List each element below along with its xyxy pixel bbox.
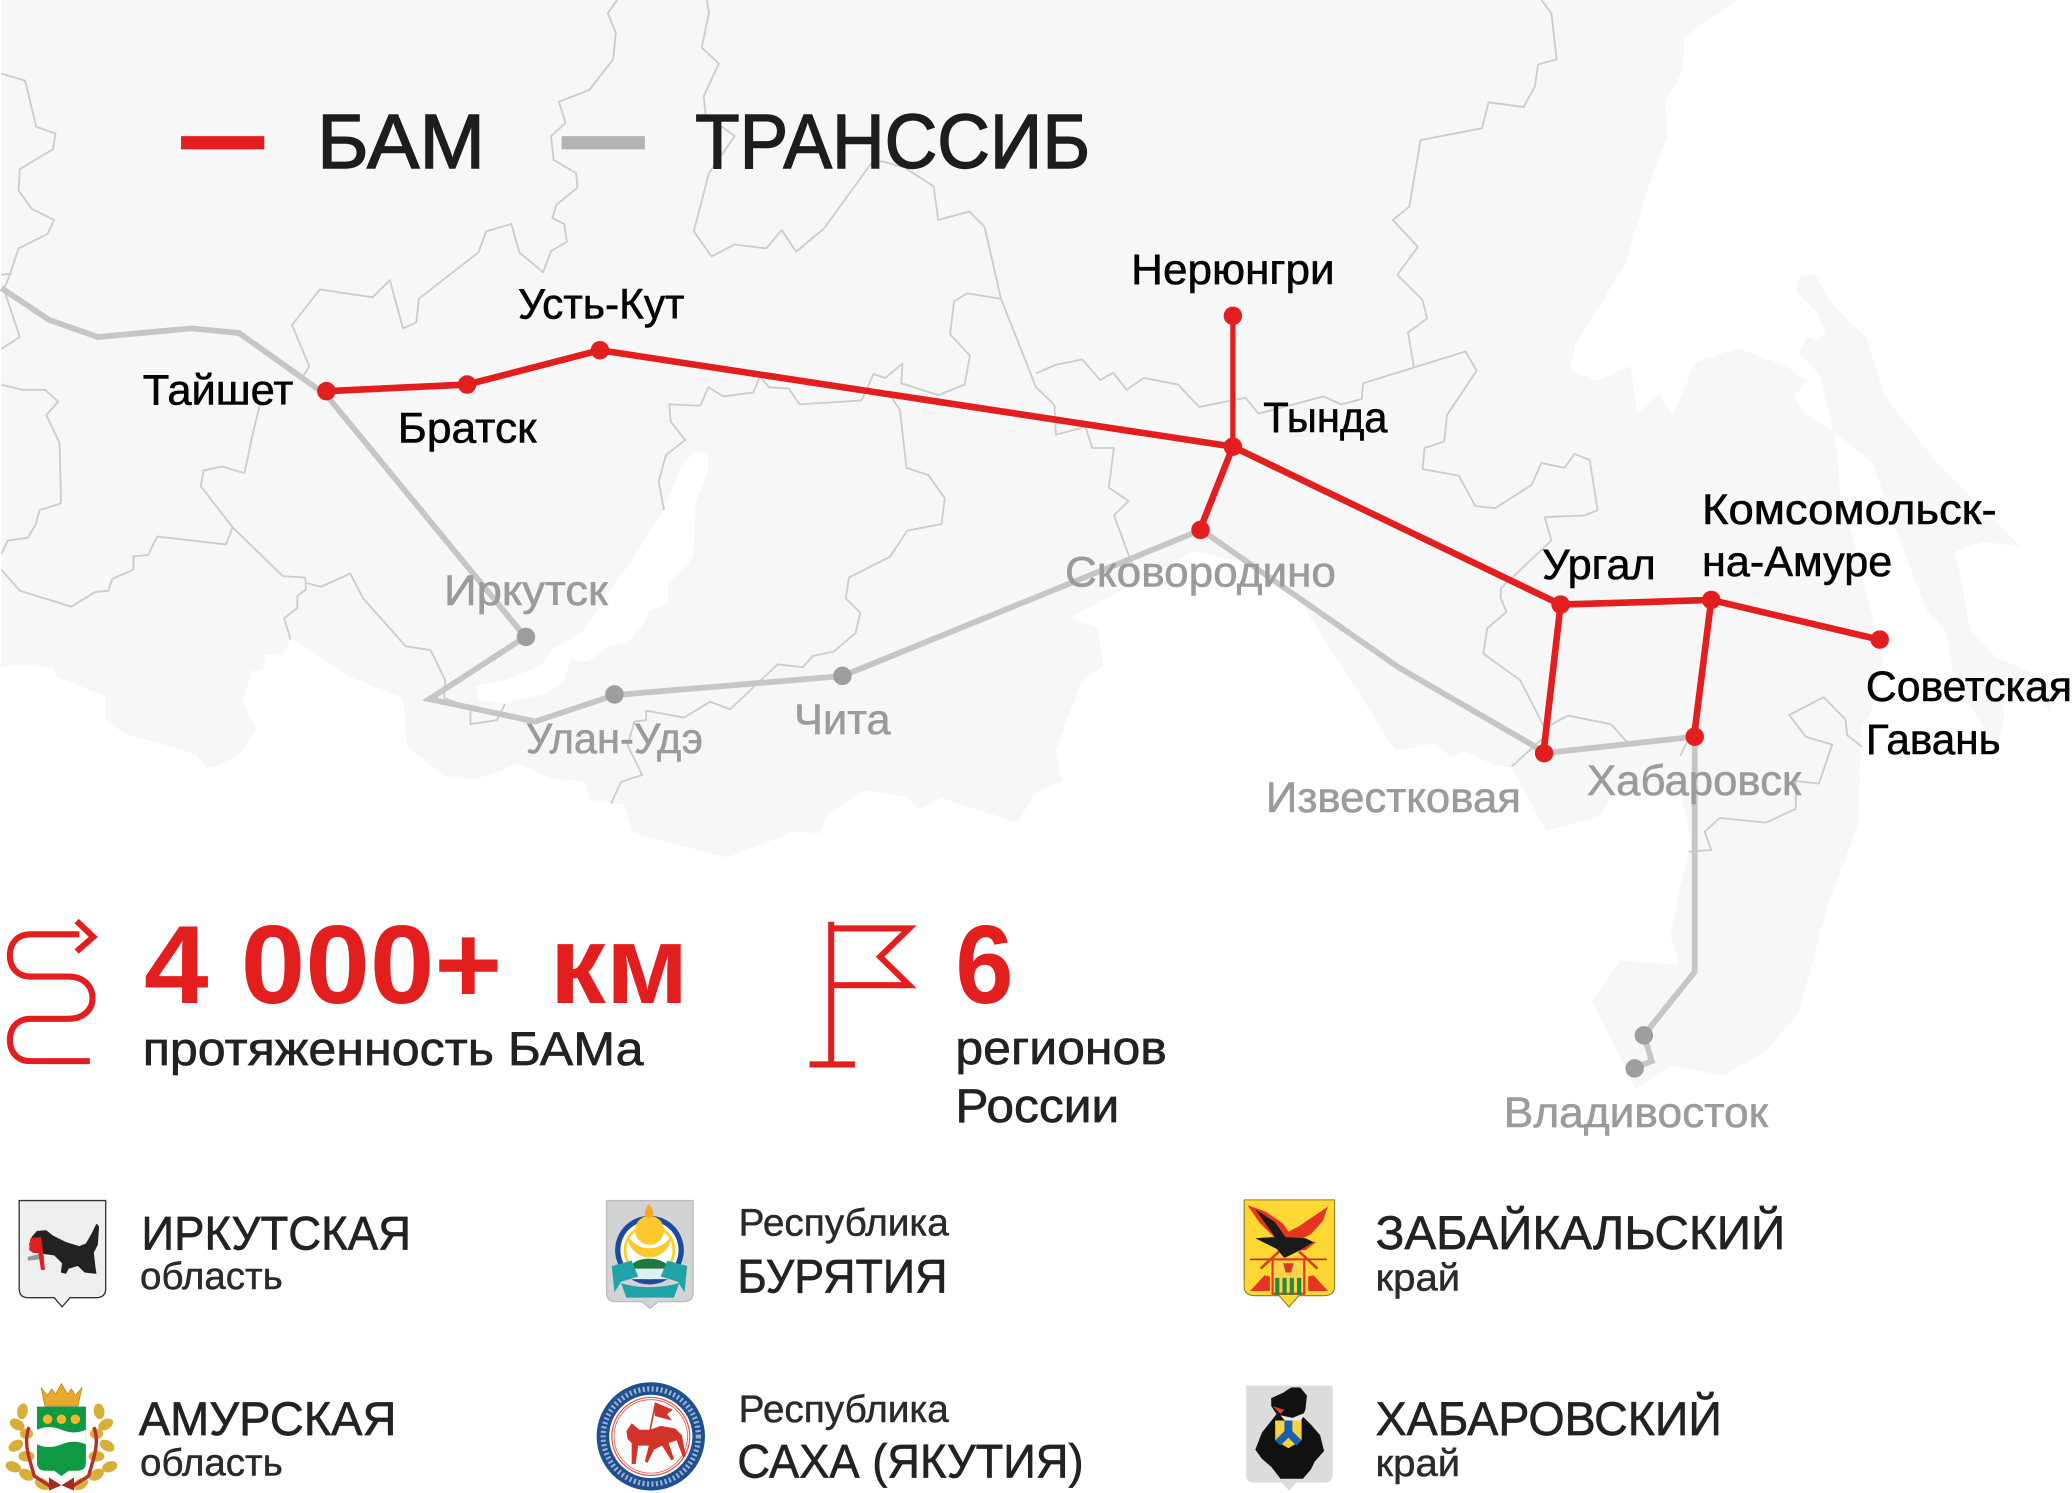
region: Buryatia [607,1201,949,1308]
stat: route length: 4 000+ [144,903,502,1027]
BAM city labels: Усть-Кут [518,280,685,328]
BAM city labels: Тында [1263,394,1388,442]
region: Irkutsk [19,1201,411,1307]
region: Zabaikalsky: ЗАБАЙКАЛЬСКИЙ [1376,1205,1785,1260]
BAM city labels: Комсомольск- [1702,486,1997,534]
BAM railway line [326,316,1879,753]
region: Buryatia: Республика [739,1202,949,1245]
region: Amur: АМУРСКАЯ [139,1393,396,1446]
Trans-Siberian station dots [517,628,1653,1078]
stat: regions count: России [955,1080,1119,1133]
icon: Zabaikalsky coat of arms [1244,1200,1335,1307]
region borders [1,0,1862,852]
region: Khabarovsk: ХАБАРОВСКИЙ [1376,1391,1722,1446]
stat: route length: протяженность БАМа [143,1023,644,1076]
region: Buryatia: БУРЯТИЯ [737,1250,947,1303]
BAM city labels: Советская [1866,663,2072,711]
BAM city labels: Братск [398,405,537,453]
map of the railway routes [1,0,2072,1137]
region: Irkutsk: ИРКУТСКАЯ [141,1207,411,1260]
icon: flag [810,922,909,1065]
BAM city labels: Нерюнгри [1131,246,1335,294]
region: Zabaikalsky [1244,1200,1785,1307]
stat: regions count [955,903,1167,1133]
Trans-Siberian city labels: Хабаровск [1587,757,1801,805]
stat: route length [143,903,688,1076]
Trans-Siberian city labels: Владивосток [1504,1089,1768,1137]
BAM station dots [317,307,1889,762]
region: Amur [4,1384,396,1493]
region: Amur: область [140,1441,283,1484]
icon: Irkutsk coat of arms [19,1201,106,1307]
Trans-Siberian city labels: Улан-Удэ [526,715,703,763]
Trans-Siberian city labels: Чита [794,696,891,744]
stat: regions count: регионов [955,1022,1167,1075]
icon: Sakha coat of arms [597,1382,705,1491]
legend: BAM [181,99,485,185]
region: Zabaikalsky: край [1376,1256,1460,1299]
icon: winding route arrow [10,921,93,1061]
region: Irkutsk: область [140,1255,283,1298]
Trans-Siberian city labels: Известковая [1266,774,1521,822]
BAM city labels: Гавань [1866,716,2001,764]
BAM city labels: на-Амуре [1702,538,1892,586]
icon: Buryatia coat of arms [607,1201,693,1308]
icon: Amur coat of arms [4,1384,119,1493]
legend: Trans-Siberian: ТРАНССИБ [695,99,1090,185]
legend [181,99,1090,185]
BAM city labels: Тайшет [143,366,293,414]
legend: BAM: БАМ [317,99,485,185]
Lake Baikal [476,451,708,703]
Trans-Siberian railway line [1,288,1695,1068]
Trans-Siberian city labels [444,549,1801,1137]
region: Sakha [597,1382,1084,1491]
Trans-Siberian city labels: Иркутск [444,567,608,615]
region: Sakha: Республика [739,1388,949,1431]
BAM city labels: Ургал [1542,541,1656,589]
region: Sakha: САХА (ЯКУТИЯ) [737,1435,1084,1488]
stat: regions count: 6 [955,903,1014,1027]
region: Khabarovsk: край [1376,1442,1460,1485]
land mass background [1,0,2052,1089]
region: Khabarovsk [1246,1386,1722,1491]
stat: route length: км [550,903,688,1027]
BAM city labels [143,246,2072,764]
Trans-Siberian city labels: Сковородино [1065,549,1336,597]
icon: Khabarovsk coat of arms [1246,1386,1333,1491]
